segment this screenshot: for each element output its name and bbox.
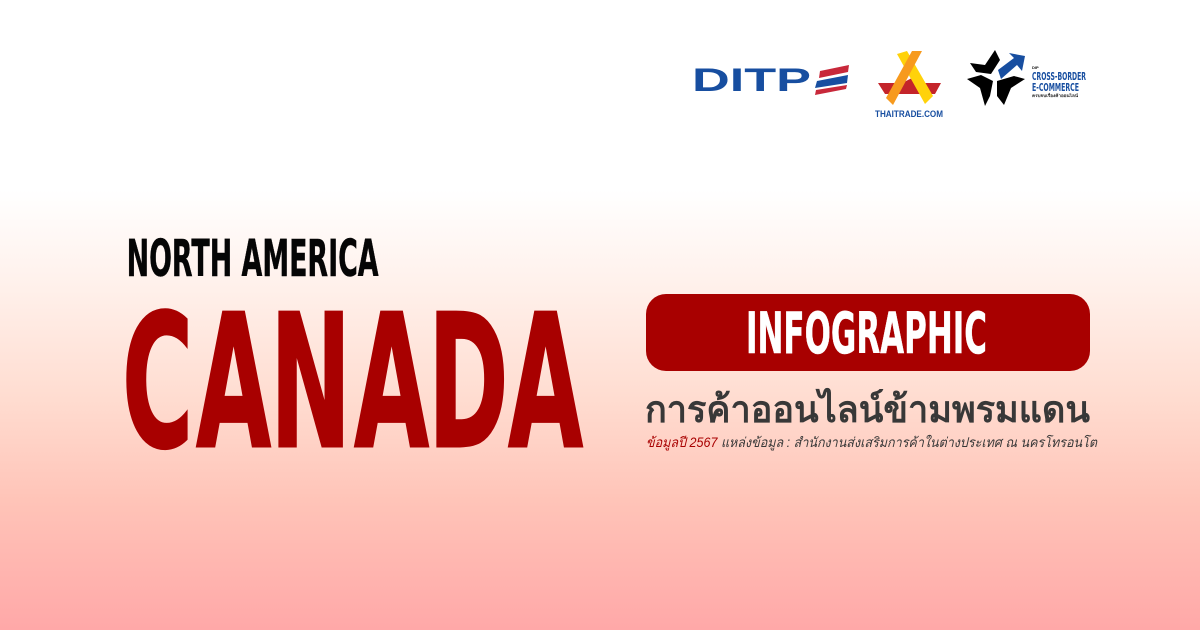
logo: Thaitrade: THAITRADE.COM xyxy=(875,109,943,119)
logo: DITP: DITP xyxy=(692,62,811,98)
source note: ข้อมูลปี 2567 แหล่งข้อมูล : สำนักงานส่งเสริมการค้าในต่างประเทศ ณ นครโทรอนโต xyxy=(646,434,1098,451)
logo: Thaitrade xyxy=(875,51,943,119)
subtitle: cross-border online trade: การค้าออนไลน์ข้ามพรมแดน xyxy=(645,387,1090,430)
title: Canada: CANADA xyxy=(122,275,583,490)
logo: Cross-border e-commerce xyxy=(967,50,1086,106)
logo: Cross-border e-commerce: ครบจบเรื่องค้าออนไลน์ xyxy=(1032,92,1078,98)
badge: Infographic: INFOGRAPHIC xyxy=(746,301,987,367)
logo: Cross-border e-commerce: E-COMMERCE xyxy=(1032,81,1079,94)
icon: Thai flag stripes xyxy=(815,65,849,95)
logo: DITP xyxy=(692,62,849,98)
heading: North America: NORTH AMERICA xyxy=(127,230,379,289)
icon: star of arrows xyxy=(967,50,1025,106)
badge: Infographic xyxy=(646,294,1090,371)
logo: Cross-border e-commerce: CROSS-BORDER xyxy=(1032,70,1086,83)
logo: Cross-border e-commerce: DIP xyxy=(1032,65,1039,70)
